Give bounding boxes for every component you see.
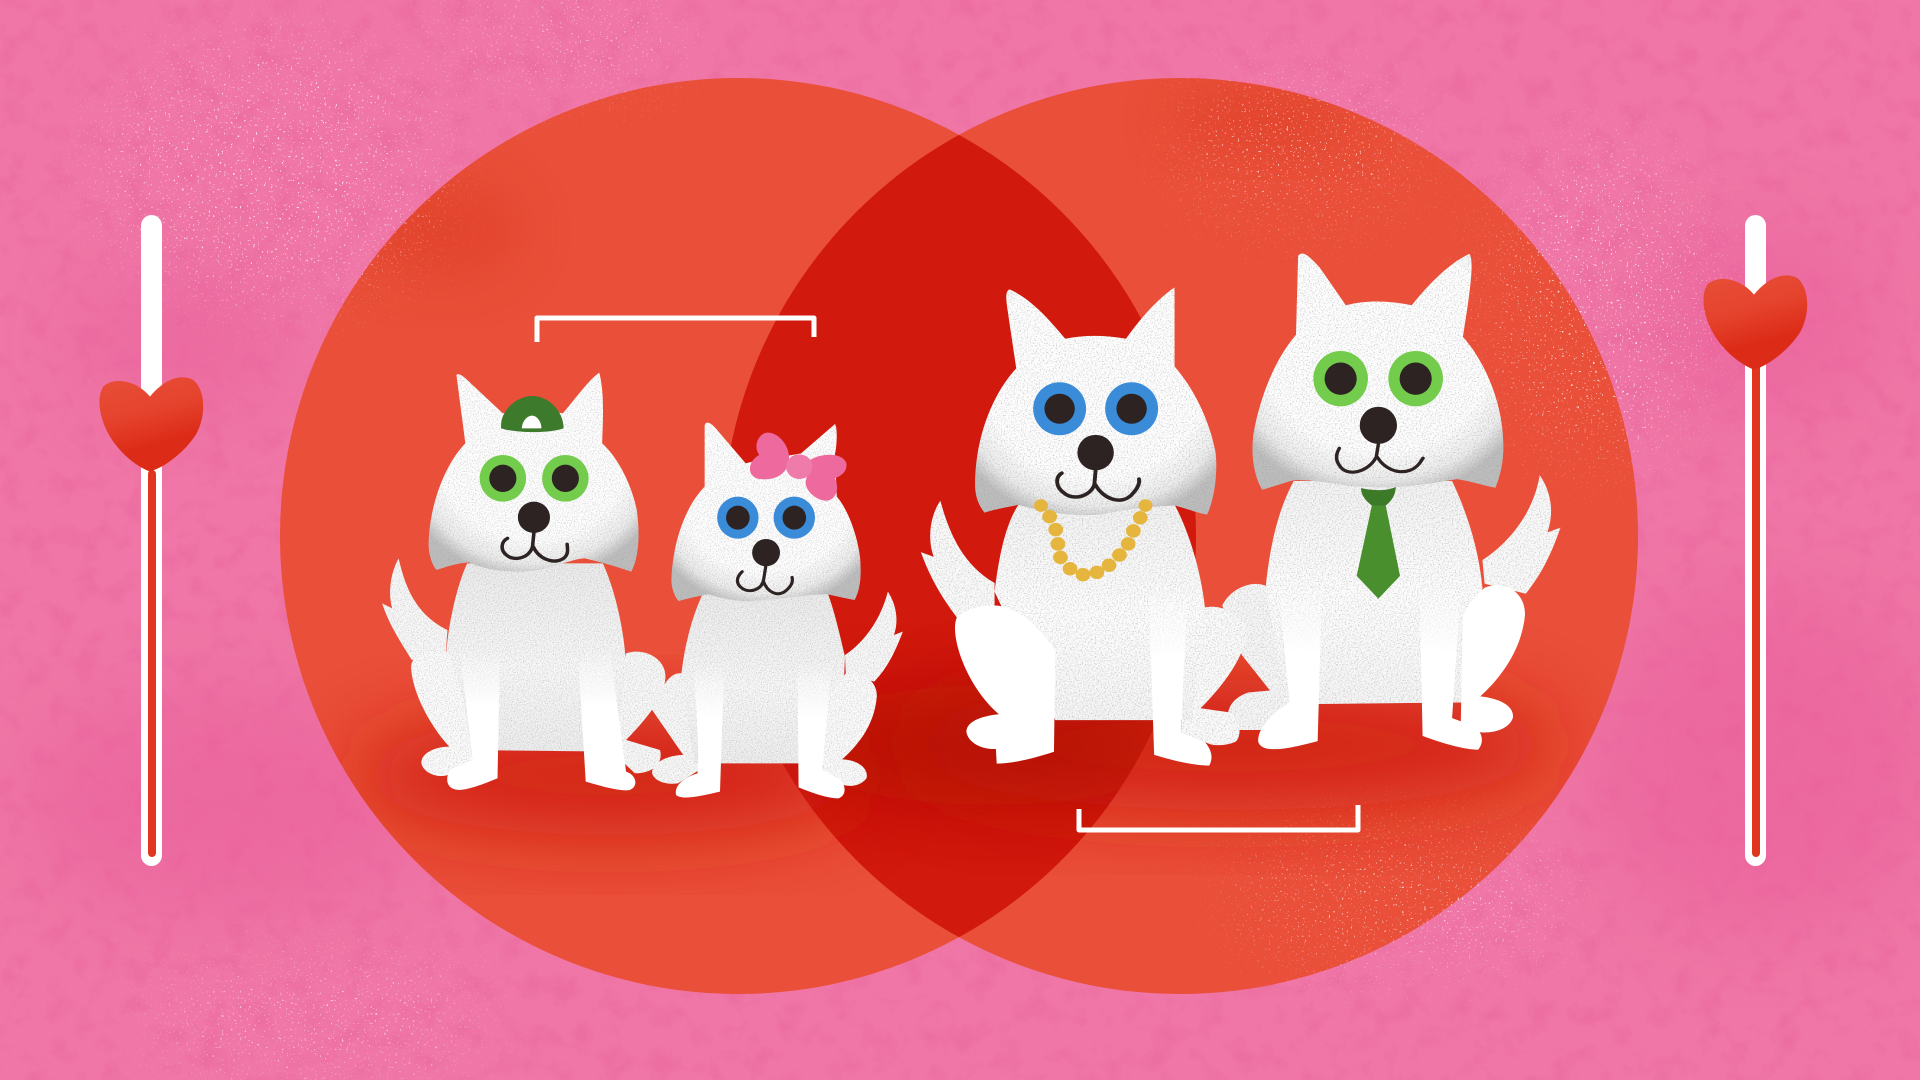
dog: necklace	[921, 287, 1247, 766]
slider: right	[1703, 215, 1807, 866]
circle overlap	[731, 135, 1196, 937]
circle: left	[280, 78, 1196, 994]
eyes	[1033, 382, 1158, 435]
tie	[1357, 487, 1400, 599]
heart: right	[1703, 275, 1807, 370]
eyes	[717, 497, 815, 539]
nose and mouth	[1057, 435, 1139, 500]
dog: bow	[651, 423, 903, 798]
necklace	[1034, 499, 1152, 581]
cap	[501, 396, 564, 432]
bracket: bottom	[1079, 805, 1358, 830]
nose and mouth	[1337, 407, 1423, 472]
overlap shadow	[790, 685, 1190, 805]
circle: right	[722, 78, 1638, 994]
nose and mouth	[737, 539, 792, 594]
floor shadows	[350, 90, 1560, 835]
dog: cap	[382, 373, 665, 790]
eyes	[1313, 351, 1443, 406]
bracket: top	[537, 318, 814, 342]
heart: left	[99, 377, 203, 472]
bow	[750, 433, 847, 501]
slider: left	[99, 215, 203, 866]
eyes	[480, 455, 589, 502]
dog: tie, rear haunch	[1222, 584, 1292, 730]
dog: tie	[1252, 253, 1561, 750]
nose and mouth	[502, 502, 568, 561]
